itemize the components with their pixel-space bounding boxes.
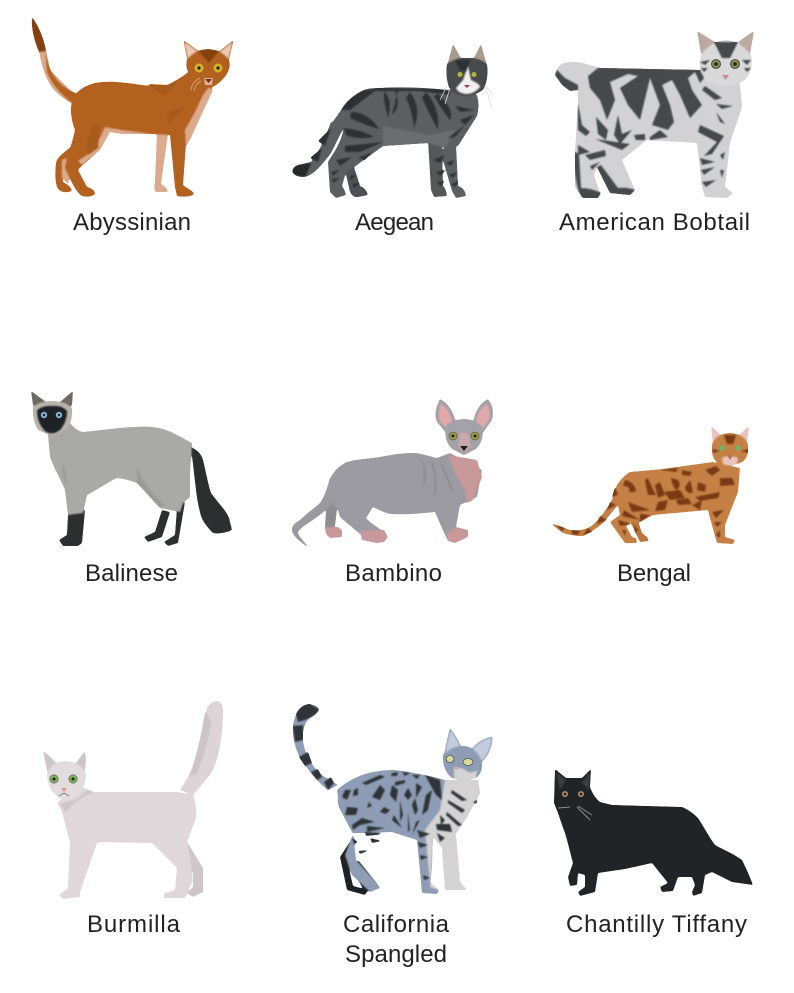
panel: Abyssinian xyxy=(32,17,233,236)
label: American Bobtail: American Bobtail xyxy=(559,209,750,236)
label: California: California xyxy=(343,911,450,938)
label: Bengal: Bengal xyxy=(617,560,691,587)
label: Spangled: Spangled xyxy=(345,941,447,968)
panel: California Spangled xyxy=(293,704,492,968)
panel: Burmilla xyxy=(43,701,223,938)
illustration: California Spangled cat xyxy=(293,704,492,895)
label: Burmilla: Burmilla xyxy=(87,911,181,938)
illustration: American Bobtail cat xyxy=(555,31,754,198)
illustration: Bengal cat xyxy=(551,426,749,544)
panel: Aegean xyxy=(293,44,493,236)
illustration: Aegean cat xyxy=(293,44,493,198)
label: Balinese: Balinese xyxy=(85,560,178,587)
illustration: Balinese cat xyxy=(31,391,232,546)
label: Aegean: Aegean xyxy=(355,209,434,236)
label: Bambino: Bambino xyxy=(345,560,442,587)
panel: American Bobtail xyxy=(555,31,754,236)
panel: Balinese xyxy=(31,391,232,587)
illustration: Bambino cat xyxy=(292,399,493,548)
label: Abyssinian: Abyssinian xyxy=(73,209,191,236)
illustration: Burmilla cat xyxy=(43,701,223,899)
illustration: Abyssinian cat xyxy=(32,17,233,197)
label: Chantilly Tiffany: Chantilly Tiffany xyxy=(566,911,747,938)
panel: Bambino xyxy=(292,399,493,587)
panel: Chantilly Tiffany xyxy=(554,769,753,938)
illustration: Chantilly Tiffany cat xyxy=(554,769,753,896)
panel: Bengal xyxy=(551,426,749,587)
